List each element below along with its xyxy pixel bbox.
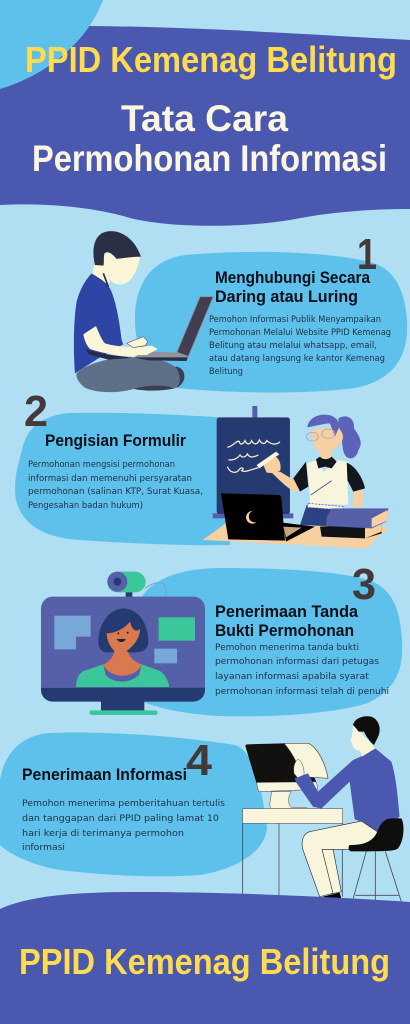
step 1 title [215, 269, 371, 306]
step 1 title: Menghubungi Secara [215, 269, 371, 287]
panel: step 4 [0, 716, 404, 902]
step 3 text: layanan informasi apabila syarat [215, 672, 370, 682]
step 2 text [28, 460, 203, 511]
panel: step 1 [74, 230, 407, 393]
main heading: Tata Cara [121, 98, 288, 139]
step 1 text: Belitung atau melalui whatsapp, email, [209, 341, 377, 351]
footer band [0, 892, 410, 1024]
step 3 text [215, 643, 389, 697]
step 4 title: Penerimaan Informasi [22, 766, 187, 784]
blob 1 [135, 252, 407, 393]
blob 2 [15, 413, 230, 545]
icon: man with laptop [74, 231, 213, 392]
number 2: 2 [24, 387, 48, 436]
step 2 title: Pengisian Formulir [45, 432, 187, 450]
step 1 title: Daring atau Luring [215, 288, 358, 306]
number 4: 4 [186, 736, 213, 785]
icon: woman at blackboard [203, 406, 389, 548]
step 2 text: Pengesahan badan hukum) [28, 501, 143, 511]
step 3 title: Bukti Permohonan [215, 622, 354, 640]
step 2 text: permohonan (salinan KTP, Surat Kuasa, [28, 487, 203, 497]
number 3: 3 [352, 560, 376, 609]
blob 4 [0, 732, 267, 876]
step 1 text [209, 315, 391, 377]
step 1 text: Belitung [209, 367, 243, 377]
blob 3 [140, 568, 402, 716]
step 3 text: permohonan informasi dari petugas [215, 657, 380, 667]
step 1 text: atau datang langsung ke kantor Kemenag [209, 354, 385, 364]
panel: step 2 [15, 387, 389, 548]
step 4 text: informasi [22, 843, 65, 853]
panel: step 3 [41, 560, 402, 716]
step 4 text: dan tanggapan dari PPID paling lamat 10 [22, 814, 219, 824]
icon: man at desktop computer [243, 716, 404, 902]
step 3 title [215, 603, 359, 640]
step 1 text: Pemohon Informasi Publik Menyampaikan [209, 315, 381, 325]
step 3 text: permohonan informasi telah di penuhi [215, 687, 389, 697]
step 4 text: hari kerja di terimanya permohon [22, 829, 184, 839]
number 1: 1 [357, 230, 377, 279]
step 2 text: Permohonan mengsisi permohonan [28, 460, 175, 470]
header band [0, 20, 410, 226]
step 3 title: Penerimaan Tanda [215, 603, 359, 621]
main heading [32, 98, 387, 179]
icon: video call monitor [41, 572, 205, 715]
step 2 text: informasi dan memenuhi persyaratan [28, 474, 192, 484]
step 3 text: Pemohon menerima tanda bukti [215, 643, 359, 653]
corner circle [0, 0, 103, 89]
step 4 text: Pemohon menerima pemberitahuan tertulis [22, 799, 226, 809]
step 1 text: Permohonan Melalui Website PPID Kemenag [209, 328, 391, 338]
step 4 text [22, 799, 226, 853]
